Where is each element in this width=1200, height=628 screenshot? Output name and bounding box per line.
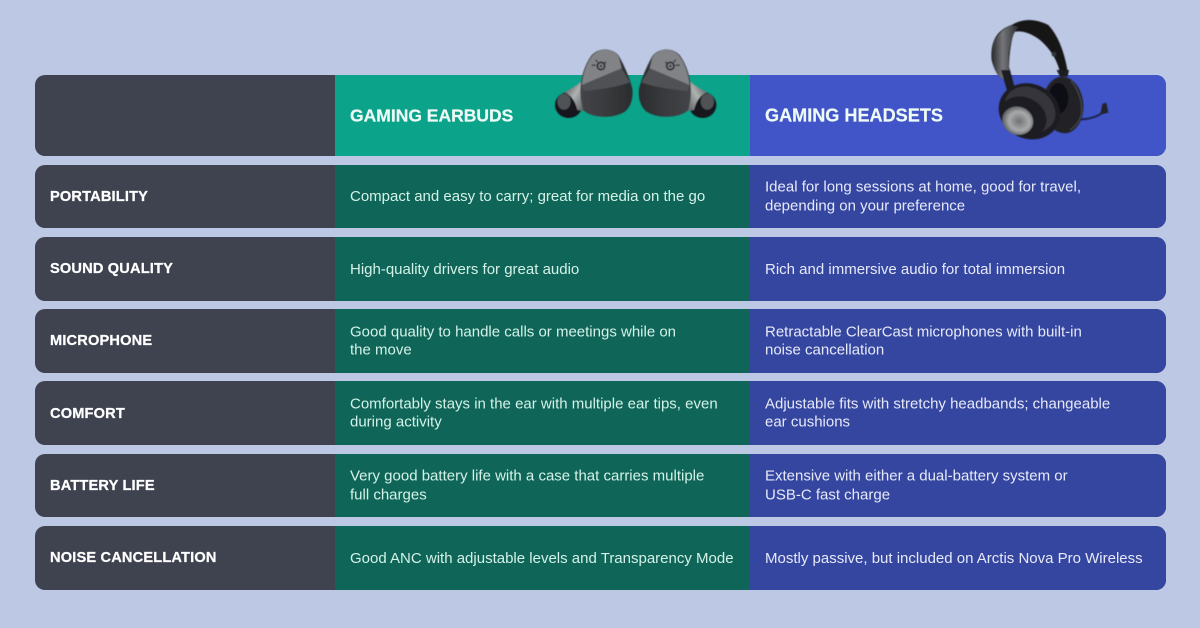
icon: earbuds	[554, 48, 717, 119]
headsets cell: battery life: Extensive with either a dual-battery system or	[765, 468, 1068, 485]
row: sound quality	[35, 237, 1166, 300]
panel: header row	[35, 75, 1166, 156]
earbuds cell: battery life	[335, 454, 750, 517]
earbuds cell: portability: Compact and easy to carry; great for media on the go	[350, 188, 705, 205]
row: noise cancellation	[35, 526, 1166, 590]
earcups	[989, 70, 1086, 149]
headsets cell: portability	[750, 164, 1166, 228]
earbuds cell: noise cancellation	[335, 526, 750, 590]
label: battery life: BATTERY LIFE	[50, 478, 155, 494]
earbuds cell: microphone: Good quality to handle calls or meetings while on	[350, 323, 676, 340]
heading: gaming earbuds: GAMING EARBUDS	[350, 105, 513, 125]
earbuds cell: comfort: Comfortably stays in the ear with multiple ear tips, even	[350, 396, 718, 413]
headsets cell: microphone	[750, 309, 1166, 372]
headsets cell: comfort: ear cushions	[765, 414, 850, 431]
label: comfort: COMFORT	[50, 406, 125, 422]
heading: gaming headsets: GAMING HEADSETS	[765, 105, 943, 125]
headsets cell: sound quality: Rich and immersive audio for total immersion	[765, 261, 1065, 278]
earbuds cell: battery life: Very good battery life with a case that carries multiple	[350, 468, 704, 485]
microphone boom	[1077, 103, 1108, 119]
earbuds cell: comfort: during activity	[350, 414, 442, 431]
heading: gaming headsets	[750, 75, 1166, 156]
icon: headset	[990, 19, 1109, 140]
headsets cell: portability: Ideal for long sessions at home, good for travel,	[765, 179, 1081, 196]
earbuds cell: comfort	[335, 381, 750, 445]
earbuds cell: sound quality: High-quality drivers for great audio	[350, 261, 579, 278]
label: portability: PORTABILITY	[50, 189, 148, 205]
label: microphone: MICROPHONE	[50, 333, 152, 349]
row: microphone	[35, 309, 1166, 372]
earbuds cell: sound quality	[335, 237, 750, 300]
headsets cell: microphone: Retractable ClearCast microphones with built-in	[765, 323, 1082, 340]
headband	[991, 20, 1068, 81]
earbuds cell: portability	[335, 164, 750, 228]
headsets cell: battery life: USB-C fast charge	[765, 486, 890, 503]
label: sound quality: SOUND QUALITY	[50, 261, 173, 277]
headsets cell: noise cancellation	[750, 526, 1166, 590]
row: portability	[35, 164, 1166, 228]
headsets cell: microphone: noise cancellation	[765, 342, 884, 359]
headsets cell: portability: depending on your preference	[765, 197, 965, 214]
label: noise cancellation: NOISE CANCELLATION	[50, 550, 217, 566]
headsets cell: noise cancellation: Mostly passive, but included on Arctis Nova Pro Wireless	[765, 550, 1143, 567]
earbuds cell: microphone: the move	[350, 342, 412, 359]
earbuds cell: noise cancellation: Good ANC with adjustable levels and Transparency Mode	[350, 550, 734, 567]
headsets cell: comfort: Adjustable fits with stretchy headbands; changeable	[765, 396, 1110, 413]
row: battery life	[35, 454, 1166, 517]
headsets cell: battery life	[750, 454, 1166, 517]
row: comfort	[35, 381, 1166, 445]
earbuds cell: battery life: full charges	[350, 486, 427, 503]
headsets cell: sound quality	[750, 237, 1166, 300]
headsets cell: comfort	[750, 381, 1166, 445]
heading: gaming earbuds	[335, 75, 750, 156]
earbuds cell: microphone	[335, 309, 750, 372]
